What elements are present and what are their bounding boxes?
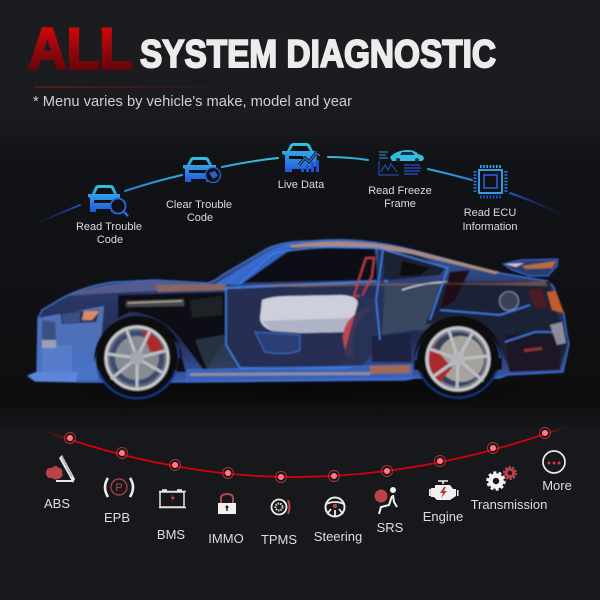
spoiler — [503, 259, 558, 276]
rear quarter panel — [425, 281, 568, 372]
lower cabin — [255, 332, 300, 354]
label: Transmission — [471, 497, 547, 512]
title words: SYSTEM DIAGNOSTIC: SYSTEM DIAGNOSTIC — [140, 33, 496, 76]
cabin glass — [226, 244, 378, 287]
car body — [28, 240, 569, 382]
system: IMMO — [208, 494, 244, 546]
function: Read Trouble Code: Code — [97, 234, 123, 246]
icon: steering wheel — [326, 498, 344, 516]
icon: car with magnifier — [88, 185, 128, 216]
system: More — [542, 451, 572, 493]
icon: brake pedal — [46, 455, 75, 483]
front fascia glass — [28, 306, 104, 381]
title — [28, 17, 496, 82]
engine bay — [118, 292, 228, 372]
rear quarter glass — [382, 282, 440, 335]
label: Live Data — [278, 179, 325, 191]
icon: tyre — [272, 500, 290, 514]
system: ABS — [44, 455, 75, 511]
icon: gears — [488, 467, 516, 490]
subtitle note: * Menu varies by vehicle's make, model and year — [33, 94, 352, 110]
icon: airbag — [374, 487, 397, 514]
glass frame lines — [226, 247, 555, 368]
function: Read Freeze Frame: Frame — [384, 198, 416, 210]
function: Clear Trouble Code — [166, 157, 232, 224]
function: Read Trouble Code — [76, 185, 142, 246]
icon: chip — [475, 166, 506, 197]
floor shadow — [10, 370, 590, 406]
system: EPB — [104, 478, 133, 525]
system: TPMS — [261, 500, 297, 547]
front wheel arch — [94, 316, 186, 372]
curve nodes — [64, 428, 550, 482]
label: TPMS — [261, 532, 297, 547]
system: SRS — [374, 487, 404, 535]
icon: parking brake: P — [115, 482, 123, 494]
tail light — [547, 291, 564, 313]
label: Read Freeze — [368, 185, 432, 197]
rear wheel arch — [414, 316, 502, 370]
label: Read Trouble — [76, 221, 142, 233]
rear wheel — [417, 318, 499, 400]
red systems curve — [45, 426, 568, 477]
icon: car with eraser badge — [183, 157, 220, 182]
label: Clear Trouble — [166, 199, 232, 211]
label: ABS — [44, 496, 70, 511]
label: More — [542, 478, 572, 493]
front wheel — [96, 317, 178, 399]
label: Steering — [314, 529, 362, 544]
icon: battery — [159, 490, 186, 508]
icon: padlock — [218, 494, 236, 514]
label: IMMO — [208, 531, 244, 546]
hood copper strip — [65, 281, 225, 296]
system: Steering — [314, 498, 362, 544]
icon: car with bar chart — [282, 143, 320, 172]
label: Engine — [423, 509, 463, 524]
icon: more dots — [543, 451, 565, 473]
function: Read ECU Information — [462, 166, 518, 233]
door panel — [226, 281, 382, 370]
system: Engine — [423, 481, 463, 524]
label: SRS — [377, 520, 404, 535]
rocker — [187, 365, 412, 382]
label: EPB — [104, 510, 130, 525]
front seat white — [260, 295, 358, 333]
function: Live Data — [278, 143, 325, 191]
function: Read ECU Information: Information — [462, 221, 518, 233]
seat red trim — [343, 307, 371, 357]
front splitter — [28, 372, 78, 382]
function: Read Freeze Frame — [368, 150, 432, 210]
label: BMS — [157, 527, 185, 542]
icon: engine — [429, 481, 458, 500]
title word: ALL: ALL — [28, 17, 132, 82]
label: Read ECU — [464, 207, 516, 219]
function arc — [40, 157, 560, 222]
fuel cap — [500, 292, 518, 310]
roof copper strip — [290, 241, 500, 274]
function: Clear Trouble Code: Code — [187, 212, 213, 224]
icon: car and charts — [379, 150, 424, 175]
system: Transmission — [471, 467, 547, 512]
transparent car illustration — [28, 240, 569, 400]
system: BMS — [157, 490, 186, 542]
